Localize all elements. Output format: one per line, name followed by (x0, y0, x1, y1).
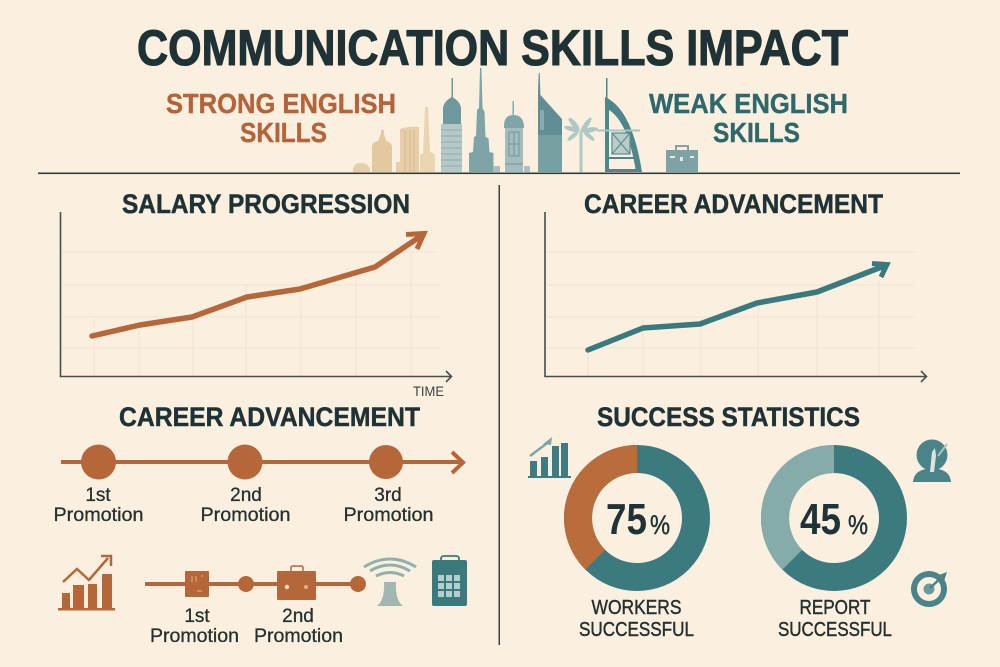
label: 3rd promotion (344, 485, 434, 526)
icon: rising bar chart (58, 556, 115, 610)
label: 2nd promotion: 2nd (230, 485, 262, 506)
heading: success statistics: SUCCESS STATISTICS (597, 402, 860, 432)
heading: strong English skills: STRONG ENGLISH (166, 88, 396, 119)
domed tower (504, 101, 524, 172)
heading: career advancement right: CAREER ADVANCEMENT (584, 189, 883, 219)
value: 45%: 45 (800, 495, 841, 544)
burj tower (469, 68, 494, 172)
label: 2nd promotion lower: Promotion (254, 626, 343, 647)
label: report successful: SUCCESSFUL (778, 619, 892, 641)
label: 3rd promotion: 3rd (374, 485, 402, 506)
label: workers successful: SUCCESSFUL (579, 619, 694, 641)
skyline illustration (353, 68, 698, 172)
header rule (38, 172, 960, 174)
heading: strong English skills: SKILLS (240, 117, 327, 148)
label: 2nd promotion lower: 2nd (282, 606, 314, 627)
icon: teal calculator case (432, 556, 467, 606)
label: 3rd promotion: Promotion (344, 505, 434, 526)
title: COMMUNICATION SKILLS IMPACT (137, 20, 848, 76)
chart: career advancement (545, 212, 926, 382)
label: 2nd promotion: Promotion (200, 505, 290, 526)
tower one (441, 78, 462, 172)
heading: weak English skills: WEAK ENGLISH (649, 88, 848, 119)
center divider (498, 185, 500, 645)
heading: career advancement left: CAREER ADVANCEMENT (119, 402, 420, 432)
chart: salary progression (60, 212, 452, 399)
icon: square node (185, 571, 209, 597)
icon: target with arrow (914, 572, 947, 604)
axis label: time: TIME (413, 384, 444, 399)
heading: weak English skills (649, 88, 848, 148)
icon: person with target (913, 440, 951, 482)
icon: signal tower (364, 559, 416, 606)
heading: weak English skills: SKILLS (713, 117, 800, 148)
heading: strong English skills (166, 88, 396, 148)
palm tree (564, 116, 598, 172)
value: 75%: % (650, 510, 670, 540)
label: workers successful: WORKERS (592, 597, 682, 619)
label: report successful (778, 597, 892, 641)
label: 2nd promotion lower (254, 606, 343, 647)
donut chart: 75 percent (578, 459, 696, 577)
label: 1st promotion lower (150, 606, 239, 647)
value: 45%: % (848, 510, 868, 540)
secondary promotion track (145, 566, 366, 647)
heading: salary progression: SALARY PROGRESSION (122, 189, 410, 219)
label: 1st promotion lower: 1st (184, 606, 210, 627)
burj al arab (597, 78, 642, 172)
icon: briefcase node (277, 566, 316, 600)
label: 1st promotion lower: Promotion (150, 626, 239, 647)
suitcase (666, 146, 698, 172)
label: 1st promotion: 1st (85, 485, 111, 506)
label: 1st promotion (54, 485, 144, 526)
promotion timeline (54, 444, 463, 526)
emirates tower (538, 73, 562, 172)
label: 1st promotion: Promotion (54, 505, 144, 526)
label: report successful: REPORT (800, 597, 870, 619)
icon: stats bars (528, 437, 571, 478)
donut chart: 45 percent (775, 459, 893, 577)
value: 75%: 75 (606, 495, 647, 544)
label: 2nd promotion (200, 485, 290, 526)
label: workers successful (579, 597, 694, 641)
